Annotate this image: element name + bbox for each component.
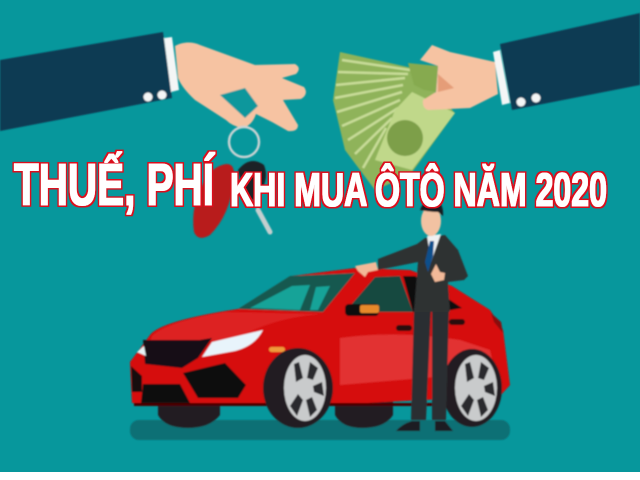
ground shadow	[130, 420, 510, 440]
title: THUẾ, PHÍ: THUẾ, PHÍ	[14, 152, 215, 218]
red car	[130, 268, 510, 428]
icon: right hand holding money	[333, 13, 640, 190]
front wheel	[263, 348, 333, 428]
rear wheel	[442, 349, 502, 427]
man in suit	[355, 200, 468, 431]
icon: left hand holding car keys	[0, 32, 306, 238]
